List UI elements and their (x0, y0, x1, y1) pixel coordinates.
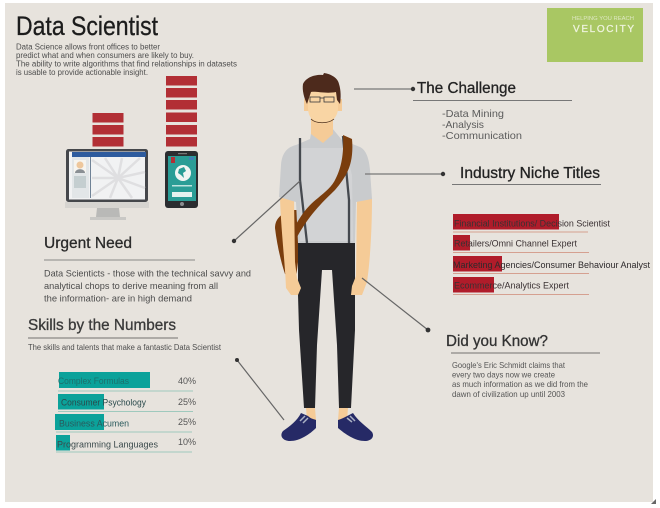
suspenders (300, 136, 349, 243)
right shoe (338, 413, 373, 441)
intro text: The ability to write algorithms that find relationships in datasets (16, 60, 237, 68)
urgent need text: the information- are in high demand (44, 294, 192, 304)
challenge list: -Data Mining (442, 108, 504, 120)
did you know text (452, 360, 588, 399)
heading: industry niche titles: Industry Niche Titles (460, 165, 600, 182)
skill: business acumen (55, 414, 196, 432)
did you know text: dawn of civilization up until 2003 (452, 389, 565, 399)
bar: retailers (453, 235, 589, 252)
shirt torso highlight (300, 148, 353, 241)
challenge list (442, 108, 522, 142)
connector: industry niche titles (365, 172, 445, 176)
bar: retailers: Retailers/Omni Channel Expert (454, 238, 577, 248)
skill: business acumen: 25% (178, 417, 196, 427)
skill: complex formulas: Complex Formulas (58, 376, 129, 387)
heading: the challenge: The Challenge (417, 80, 516, 97)
icon: desktop monitor (65, 149, 149, 220)
right arm (351, 198, 372, 295)
glasses (310, 97, 334, 102)
logo: velocity (547, 8, 643, 62)
skill: programming languages: Programming Languages (57, 440, 158, 450)
bar: marketing agencies (453, 256, 650, 274)
skill: business acumen: Business Acumen (59, 418, 129, 430)
ears (304, 99, 342, 111)
left shoe (281, 413, 316, 441)
skill: consumer psychology: 25% (178, 397, 196, 407)
heading: did you know: Did you Know? (446, 333, 548, 350)
bar chart: skills (55, 372, 196, 452)
red block stack: mobile (166, 76, 197, 146)
bar list: industry niche titles (453, 214, 650, 294)
urgent need text (44, 268, 251, 304)
bar: financial institutions (453, 214, 610, 232)
ankles (306, 408, 348, 420)
heading: skills by the numbers: Skills by the Numbers (28, 317, 176, 334)
heading: urgent need: Urgent Need (44, 235, 132, 252)
urgent need text: analytical chops to derive meaning from all (44, 281, 218, 292)
hair (303, 73, 341, 104)
logo: velocity: HELPING YOU REACH (572, 16, 634, 22)
intro text: is usable to provide actionable insight. (16, 68, 148, 77)
intro text (16, 42, 237, 77)
skills subtitle: The skills and talents that make a fantastic Data Scientist (28, 343, 222, 352)
connector: urgent need (232, 181, 300, 243)
skill: consumer psychology (58, 394, 196, 412)
person illustration (275, 73, 373, 441)
skill: programming languages (56, 435, 196, 452)
left arm (280, 198, 301, 295)
did you know text: every two days now we create (452, 370, 555, 380)
bar: ecommerce: Ecommerce/Analytics Expert (454, 280, 569, 290)
skill: complex formulas (58, 372, 196, 391)
neck (311, 118, 333, 143)
bag (275, 210, 298, 278)
resize handle (651, 499, 656, 504)
shoe laces (300, 416, 355, 423)
skill: consumer psychology: Consumer Psychology (61, 398, 146, 408)
skill: programming languages: 10% (178, 437, 196, 447)
did you know text: as much information as we did from the (452, 379, 588, 389)
logo: velocity: VELOCITY (573, 24, 634, 35)
bar: financial institutions: Financial Institutions/ Decision Scientist (454, 218, 610, 228)
title: Data Scientist (16, 11, 158, 41)
icon: smartphone (165, 151, 198, 208)
challenge list: -Analysis (442, 119, 484, 131)
skill: complex formulas: 40% (178, 376, 196, 386)
intro text: predict what and when consumers are likely to buy. (16, 51, 194, 60)
connector: the challenge (354, 87, 415, 91)
did you know text: Google's Eric Schmidt claims that (452, 360, 566, 370)
jaw line (311, 119, 334, 123)
challenge list: -Communication (442, 130, 522, 142)
legs (298, 240, 355, 408)
face (308, 90, 338, 124)
shirt (279, 128, 372, 243)
connector: skills to shoe (235, 358, 284, 420)
urgent need text: Data Scienticts - those with the technical savvy and (44, 268, 251, 280)
bar: ecommerce (453, 277, 589, 294)
bar: marketing agencies: Marketing Agencies/Consumer Behaviour Analyst (453, 260, 650, 270)
intro text: Data Science allows front offices to better (16, 42, 160, 52)
connector: did you know (362, 278, 430, 332)
messenger strap (295, 135, 352, 237)
red block stack: desktop (92, 113, 124, 146)
